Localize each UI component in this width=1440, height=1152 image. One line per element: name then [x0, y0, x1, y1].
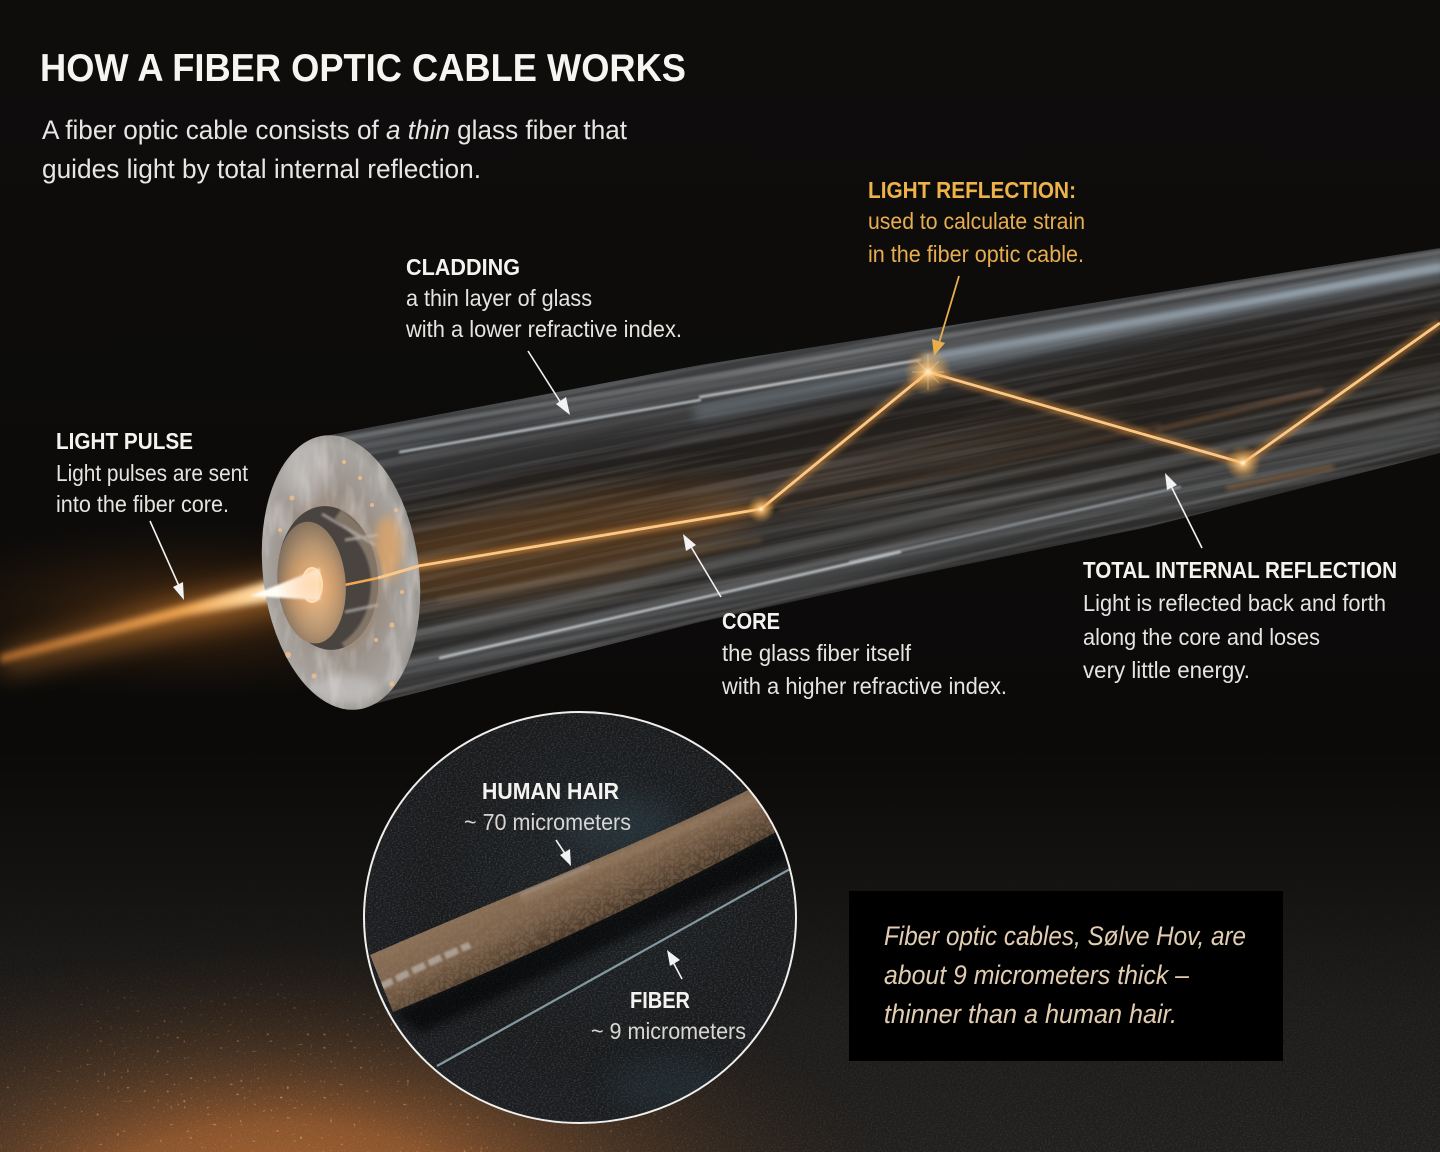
callout box: fiber thickness note: Fiber optic cables, Sølve Hov, are [884, 921, 1246, 951]
callout: light reflection: used to calculate strain [868, 208, 1085, 234]
arrow: total internal reflection [1165, 473, 1202, 548]
arrow: cladding [528, 351, 570, 415]
panel: magnified comparison circle [360, 710, 800, 1130]
callout: total internal reflection: along the core and loses [1083, 624, 1320, 650]
callout: core [721, 608, 1007, 699]
light path zigzag in the core [412, 323, 1440, 567]
fiber optic cable body [330, 248, 1440, 704]
intro text: A fiber optic cable consists of a thin glass fiber that [42, 115, 627, 145]
callout box: fiber thickness note: about 9 micrometers thick – [884, 960, 1190, 990]
callout: core: with a higher refractive index. [721, 673, 1007, 699]
callout: light reflection: in the fiber optic cable. [868, 241, 1084, 267]
callout: light pulse: into the fiber core. [56, 491, 229, 517]
callout box: fiber thickness note [849, 891, 1283, 1061]
callout: light pulse [56, 428, 249, 517]
arrow: light pulse [150, 521, 184, 600]
callout: core: the glass fiber itself [722, 640, 912, 666]
callout: cladding: with a lower refractive index. [405, 316, 682, 342]
light beam entering the cable [0, 480, 500, 740]
callout: cladding: a thin layer of glass [406, 285, 592, 311]
intro text [42, 115, 627, 184]
callout: light pulse: Light pulses are sent [56, 460, 249, 486]
cable end face [250, 435, 420, 710]
label: fiber [591, 987, 746, 1044]
callout: light reflection: LIGHT REFLECTION: [868, 177, 1076, 203]
arrow: light reflection [932, 276, 959, 356]
callout: total internal reflection: TOTAL INTERNAL REFLECTION [1083, 557, 1397, 583]
callout: light reflection [868, 177, 1085, 267]
callout: total internal reflection: Light is reflected back and forth [1083, 590, 1386, 616]
callout: cladding [405, 254, 682, 342]
callout: cladding: CLADDING [406, 254, 520, 280]
callout: light pulse: LIGHT PULSE [56, 428, 193, 454]
callout: total internal reflection [1083, 557, 1397, 683]
hair shadow [393, 832, 800, 1034]
callout: total internal reflection: very little energy. [1083, 657, 1250, 683]
fiber strand [437, 869, 790, 1066]
callout: core: CORE [722, 608, 780, 634]
label: human hair [464, 778, 631, 835]
human hair strand [365, 785, 780, 1015]
title: HOW A FIBER OPTIC CABLE WORKS [40, 47, 686, 90]
label: human hair: HUMAN HAIR [482, 778, 619, 804]
arrow: human hair [556, 840, 571, 866]
background [0, 871, 1440, 1152]
arrow: fiber [667, 950, 682, 979]
arrow: core [683, 534, 721, 597]
label: fiber: ~ 9 micrometers [591, 1018, 746, 1044]
intro text: guides light by total internal reflection. [42, 154, 481, 184]
callout box: fiber thickness note: thinner than a human hair. [884, 999, 1177, 1029]
label: human hair: ~ 70 micrometers [464, 809, 631, 835]
label: fiber: FIBER [630, 987, 690, 1013]
